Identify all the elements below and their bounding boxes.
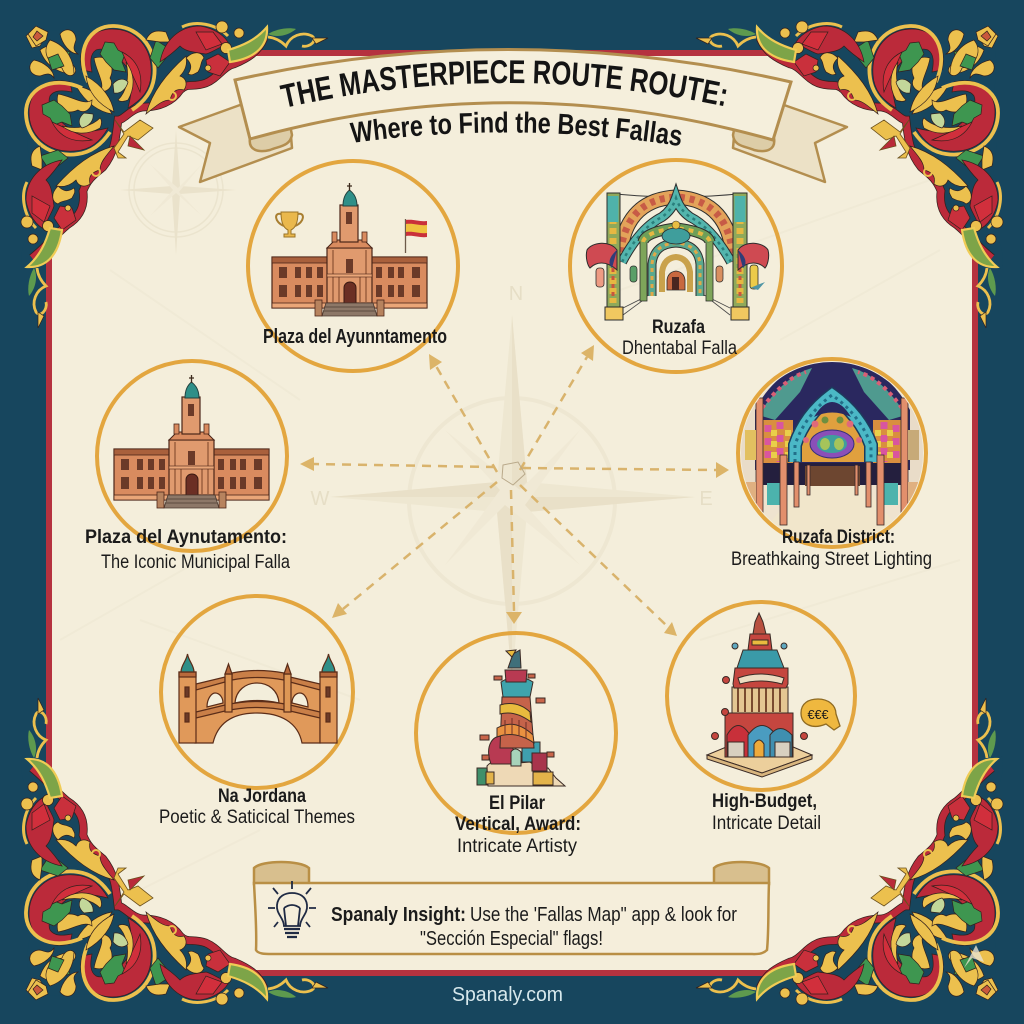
title text: THE MASTERPIECE ROUTE ROUTE: <box>279 60 726 107</box>
icon: euro bubble <box>801 699 840 730</box>
label: Ruzafa <box>652 317 705 338</box>
label: Plaza del Aynutamento: <box>85 527 287 548</box>
large central compass: E <box>699 488 713 510</box>
icon: spanish flag <box>406 219 427 253</box>
small faded compass <box>120 130 236 255</box>
sublabel: Breathkaing Street Lighting <box>731 549 932 570</box>
insight text continued: Use the 'Fallas Map" app & look for <box>470 904 737 926</box>
stop: Ruzafa central falla <box>570 160 782 372</box>
icon: ornate falla <box>707 613 812 777</box>
sublabel: Dhentabal Falla <box>622 338 737 359</box>
stop: High-Budget <box>667 602 855 834</box>
large central compass: W <box>311 488 330 510</box>
bow and lantern left <box>586 243 617 287</box>
insight text: Spanaly Insight: <box>331 904 466 926</box>
bow and lantern right <box>738 243 769 290</box>
label: El Pilar <box>489 793 546 814</box>
label: Na Jordana <box>218 786 306 807</box>
insight scroll <box>254 862 769 954</box>
icon: lightbulb <box>268 881 316 937</box>
icon: tower falla <box>477 650 565 786</box>
sublabel: The Iconic Municipal Falla <box>101 552 290 573</box>
scroll body <box>254 883 769 954</box>
ornament: bottom-left corner <box>21 698 328 1005</box>
footer brand: Spanaly.com <box>452 984 563 1006</box>
icon: trophy <box>276 212 303 237</box>
sublabel: Intricate Artisty <box>457 836 577 857</box>
title banner <box>178 48 848 184</box>
large central compass <box>311 283 713 680</box>
scroll rolls <box>254 862 769 884</box>
icon: euro bubble: €€€ <box>808 707 829 722</box>
sublabel: Vertical, Award: <box>455 814 581 835</box>
route arrows <box>300 345 729 636</box>
stop: Plaza del Ayuntamiento municipal falla <box>85 361 290 573</box>
label: Plaza del Ayunntamento <box>263 326 447 348</box>
icon: town hall <box>114 375 269 508</box>
label: High-Budget, <box>712 791 817 812</box>
banner front <box>235 49 791 140</box>
stop: El Pilar <box>416 633 616 857</box>
large central compass: N <box>509 283 523 305</box>
banner tails <box>179 105 847 182</box>
icon: town hall <box>272 183 427 316</box>
stop: Na Jordana <box>159 596 355 828</box>
stop: Plaza del Ayuntamiento top <box>248 161 458 371</box>
label: Ruzafa District: <box>782 527 895 548</box>
icon: bridge <box>179 654 337 743</box>
subtitle text: Where to Find the Best Fallas <box>350 112 682 146</box>
ornament: top-right corner <box>696 21 1003 328</box>
illustration: illuminated street <box>741 362 923 544</box>
sublabel: Poetic & Saticical Themes <box>159 807 355 828</box>
insight second line: "Sección Especial" flags! <box>420 928 603 950</box>
icon: light arch gate <box>586 193 769 320</box>
ornament: top-left corner <box>21 21 328 328</box>
sublabel: Intricate Detail <box>712 813 821 834</box>
stop: Ruzafa district <box>731 358 932 570</box>
ornament: bottom-right corner <box>696 698 1003 1005</box>
icon: corner watermark star <box>964 945 984 968</box>
